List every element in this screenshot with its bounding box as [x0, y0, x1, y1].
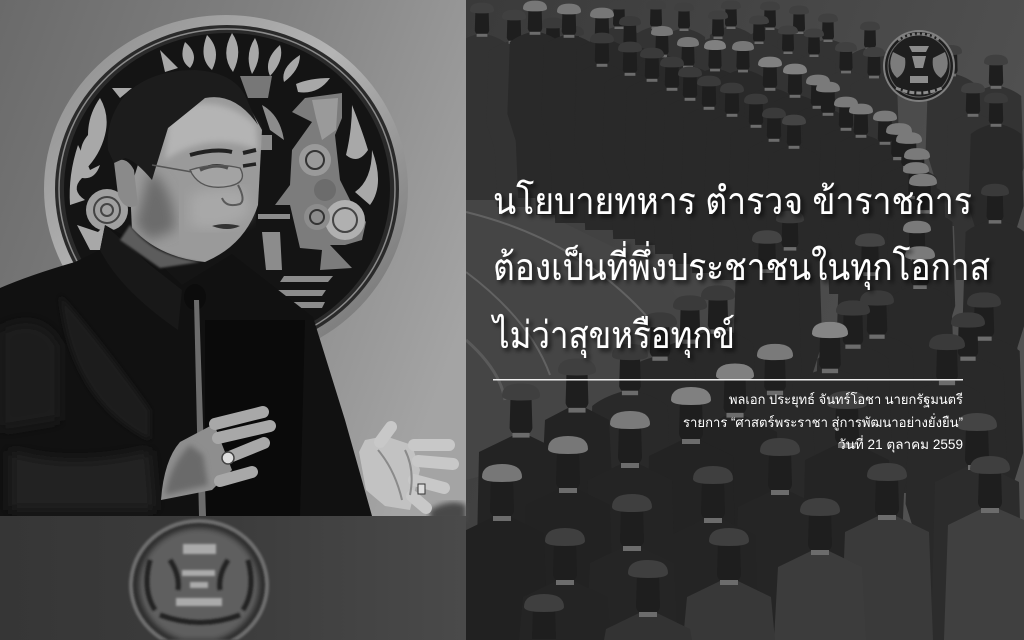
attribution text block: พลเอก ประยุทธ์ จันทร์โอชา นายกรัฐมนตรี — [729, 391, 963, 408]
panel: left photo of speaker at podium — [0, 0, 466, 640]
heading: main quote — [490, 179, 990, 358]
lion figure — [275, 93, 366, 270]
eyebrows, eyes and glasses — [190, 150, 256, 155]
podium seal — [129, 519, 269, 640]
left hand with ring — [161, 412, 270, 500]
divider rule — [493, 379, 963, 380]
icon: government seal top right — [883, 30, 955, 102]
officers front ranks — [456, 358, 1024, 640]
officers rear ranks — [454, 0, 1024, 280]
attribution text block: รายการ “ศาสตร์พระราชา สู่การพัฒนาอย่างยั่งยืน” — [683, 413, 963, 431]
speaker head — [108, 70, 262, 268]
attribution text block: วันที่ 21 ตุลาคม 2559 — [838, 435, 963, 453]
right hand gesturing — [359, 427, 466, 522]
podium — [0, 516, 466, 640]
attribution text block — [683, 391, 963, 453]
microphone stand — [184, 284, 206, 516]
panel: right photo of uniformed officers — [454, 0, 1024, 640]
heading: main quote: ไม่ว่าสุขหรือทุกข์ — [490, 314, 735, 358]
road with curved markings — [466, 175, 780, 480]
seal flames — [70, 33, 378, 250]
ear — [114, 160, 138, 207]
officers middle ranks — [507, 1, 1024, 640]
large Garuda seal on wall — [44, 15, 408, 363]
seal centre pedestal — [240, 76, 333, 308]
nose and mouth — [222, 185, 243, 205]
hair — [108, 70, 258, 180]
heading: main quote: นโยบายทหาร ตำรวจ ข้าราชการ — [493, 179, 972, 223]
speaker body in dark jacket — [0, 225, 372, 516]
